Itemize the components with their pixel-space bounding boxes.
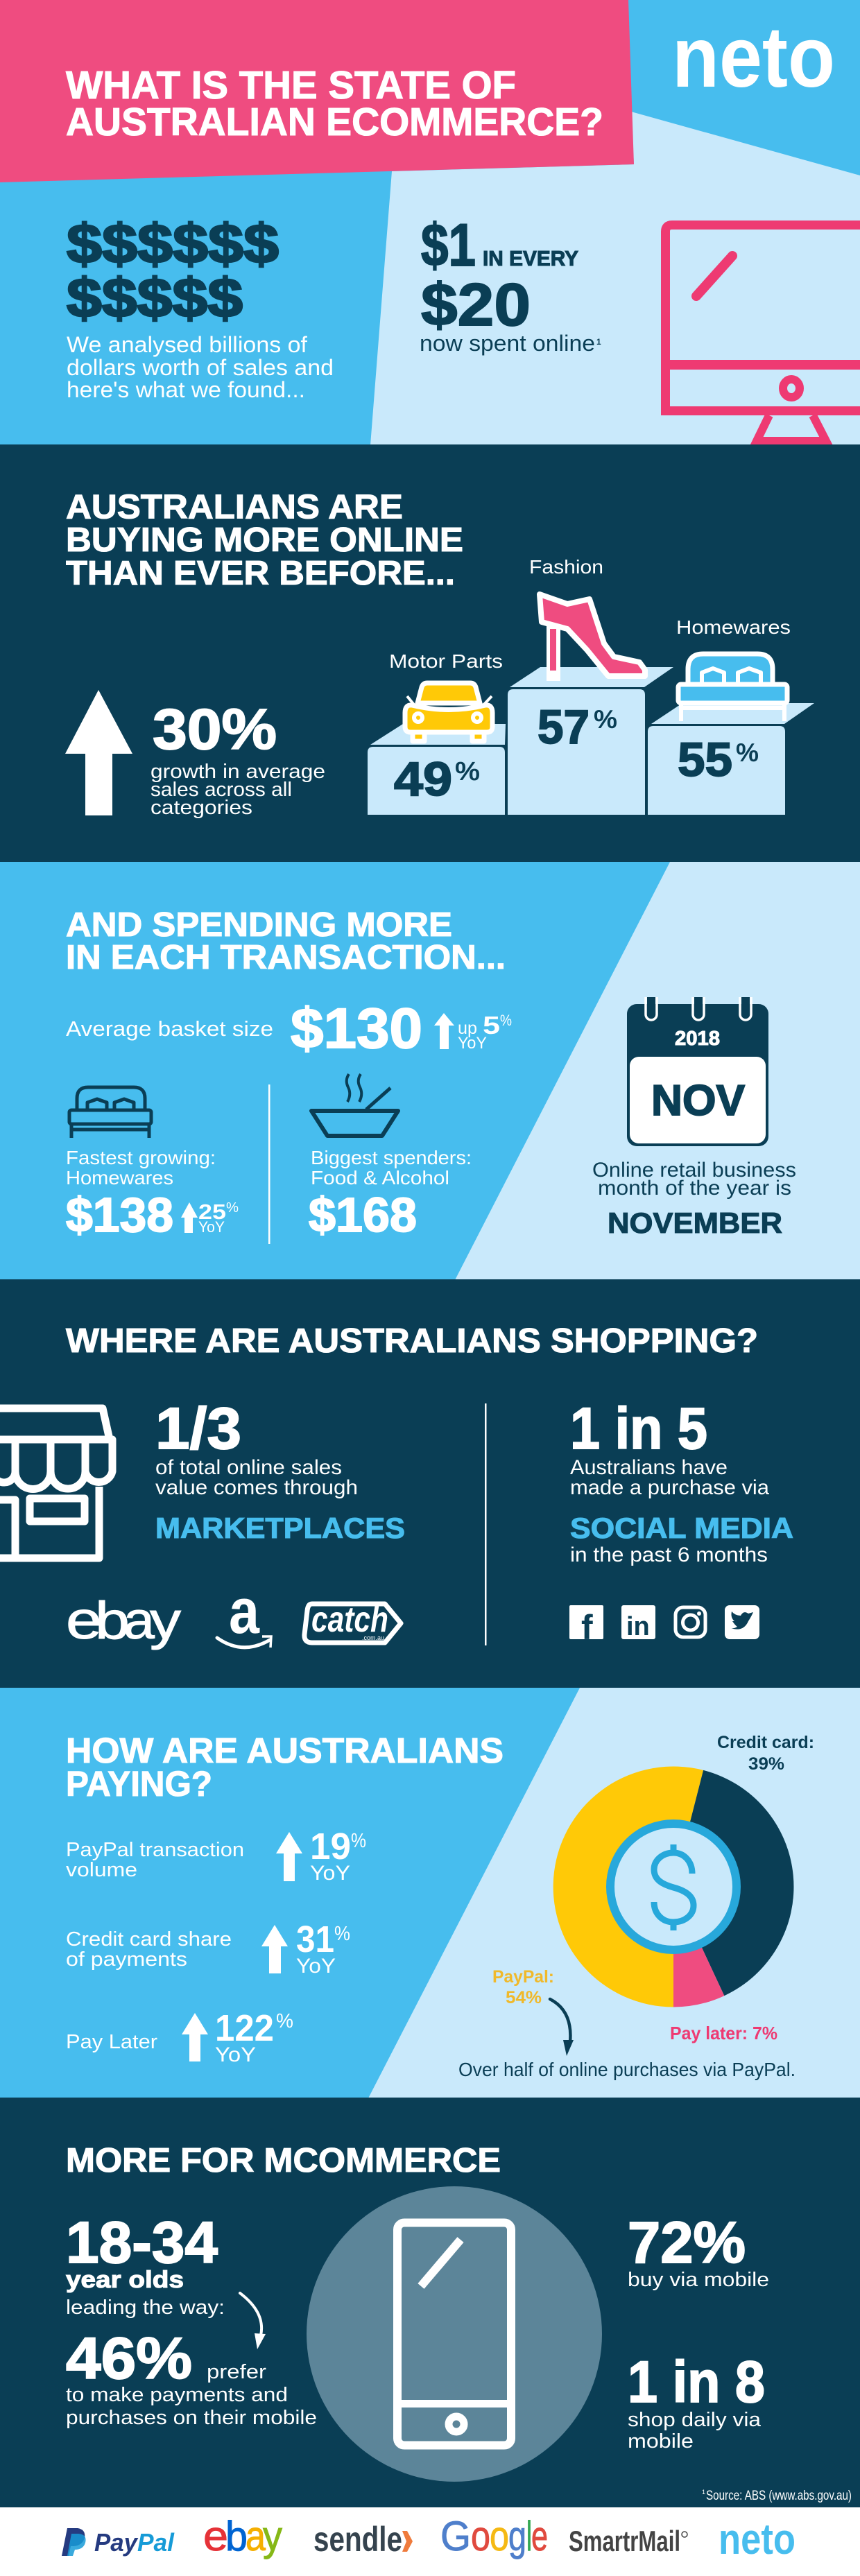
- icon: calendar: NOV: [651, 1077, 745, 1125]
- podium: homewares: Homewares: [676, 616, 791, 638]
- stat: average basket size: 5: [483, 1011, 500, 1039]
- panel: buying more online: [0, 444, 860, 862]
- logo: ebay: e: [66, 1591, 102, 1650]
- label: paypal: [492, 1967, 554, 2007]
- podium: homewares: [648, 616, 814, 815]
- stat: marketplaces: of total online sales: [155, 1456, 342, 1479]
- icon: mobile phone: [393, 2223, 515, 2445]
- label: paypal: 54%: [506, 1988, 542, 2007]
- stat: biggest spenders: $168: [309, 1188, 417, 1242]
- stat: biggest spenders: Biggest spenders:: [311, 1147, 472, 1168]
- podium: motor parts: Motor Parts: [389, 650, 503, 672]
- callout: busiest month: month of the year is: [598, 1177, 791, 1200]
- heading: THAN EVER BEFORE...: [66, 555, 455, 592]
- callout: busiest month: [592, 1159, 796, 1239]
- stat: 30% growth: sales across all: [150, 779, 292, 801]
- logo: paypal: Pay: [94, 2528, 139, 2557]
- logo: catch: catch: [311, 1600, 388, 1640]
- podium: fashion: %: [594, 705, 617, 734]
- icons: social media: [569, 1605, 759, 1647]
- icon: steaming bowl: [311, 1074, 398, 1136]
- stat: credit card share: YoY: [296, 1955, 336, 1978]
- icons: social media: in: [626, 1612, 650, 1641]
- logo: amazon: [217, 1576, 271, 1648]
- stat: fastest growing: Fastest growing:: [66, 1147, 216, 1168]
- stat: $1 in every $20: now spent online: [420, 331, 595, 356]
- logo: smartrmail: SmartrMail: [569, 2525, 680, 2557]
- caption: Over half of online purchases via PayPal.: [458, 2059, 796, 2080]
- stat: credit card share: Credit card share: [66, 1928, 232, 1951]
- logo: catch: .com.au: [362, 1634, 384, 1641]
- stat: fastest growing: [66, 1147, 239, 1242]
- stat: 72%: 72%: [628, 2210, 746, 2275]
- label: credit card: 39%: [748, 1754, 784, 1774]
- icon: calendar: 2018: [675, 1028, 720, 1050]
- logo: ebay: a: [123, 1591, 155, 1650]
- dollar signs: $$$$$: [67, 267, 243, 329]
- stat: social media: 1 in 5: [570, 1396, 707, 1461]
- neto logo: neto: [672, 10, 835, 105]
- logo: google: l: [526, 2513, 532, 2559]
- intro text: [67, 332, 334, 402]
- podium: homewares: %: [736, 738, 759, 767]
- stat: paypal volume: 19: [310, 1826, 351, 1867]
- panel: header and intro: [0, 0, 860, 445]
- dollar signs: [67, 213, 279, 329]
- icon: car: [405, 683, 492, 741]
- logo: google: G: [440, 2513, 471, 2559]
- intro text: dollars worth of sales and: [67, 355, 334, 380]
- logo: google: o: [471, 2513, 490, 2559]
- stat: average basket size: [66, 997, 512, 1060]
- stat: paypal volume: %: [351, 1830, 366, 1852]
- podium: homewares: 55: [678, 733, 732, 786]
- callout: busiest month: NOVEMBER: [608, 1207, 782, 1239]
- stat: $1 in every $20: [420, 212, 601, 356]
- heading: [66, 906, 506, 976]
- heading: AUSTRALIANS ARE: [66, 488, 403, 526]
- stat: social media: made a purchase via: [570, 1476, 769, 1499]
- stat: 46% prefer: prefer: [207, 2361, 266, 2383]
- heading: AND SPENDING MORE: [66, 906, 452, 944]
- logo: google: o: [490, 2513, 509, 2559]
- logo: ebay colour: y: [263, 2513, 282, 2559]
- stat: paypal volume: volume: [66, 1859, 137, 1881]
- stat: $1 in every $20: 1: [596, 337, 601, 347]
- stat: credit card share: 31: [296, 1919, 334, 1960]
- intro text: We analysed billions of: [67, 332, 307, 357]
- callout: busiest month: Online retail business: [592, 1159, 796, 1182]
- stat: $1 in every $20: IN EVERY: [483, 246, 578, 270]
- stat: credit card share: [66, 1919, 350, 1978]
- logo: paypal: Pal: [137, 2528, 175, 2557]
- heading: BUYING MORE ONLINE: [66, 521, 463, 559]
- panel: partner logos: [0, 2507, 860, 2576]
- podium: fashion: 57: [538, 700, 590, 754]
- icon: high heel shoe: [540, 594, 645, 681]
- podium: motor parts: [368, 650, 506, 815]
- stat: average basket size: %: [500, 1012, 512, 1029]
- stat: paypal volume: YoY: [310, 1862, 350, 1885]
- logo: ebay: b: [95, 1591, 130, 1650]
- icon: dollar sign: [654, 1844, 694, 1930]
- stat: 1 in 8: shop daily via: [628, 2409, 762, 2431]
- stat: paypal volume: [66, 1826, 366, 1885]
- stat: social media: Australians have: [570, 1456, 728, 1479]
- stat: average basket size: YoY: [458, 1034, 487, 1053]
- source note: 1: [702, 2489, 705, 2496]
- stat: 30% growth: 30%: [153, 697, 277, 761]
- panel: where australians shop: [0, 1279, 860, 1688]
- stat: biggest spenders: [309, 1147, 472, 1242]
- stat: credit card share: of payments: [66, 1948, 187, 1971]
- stat: credit card share: %: [334, 1923, 350, 1945]
- title banner: AUSTRALIAN ECOMMERCE?: [66, 100, 603, 144]
- stat: 18-34 year olds: leading the way:: [66, 2297, 225, 2319]
- logo: ebay colour: e: [203, 2513, 228, 2559]
- stat: pay later: Pay Later: [66, 2031, 157, 2053]
- stat: 1 in 8: 1 in 8: [628, 2349, 765, 2414]
- stat: marketplaces: [155, 1396, 405, 1544]
- logo: google: e: [531, 2513, 548, 2559]
- heading: MORE FOR MCOMMERCE: [66, 2142, 501, 2179]
- icon: bed: [678, 654, 787, 721]
- heading: [66, 488, 463, 592]
- logo: ebay colour: b: [225, 2513, 248, 2559]
- stat: 46% prefer: purchases on their mobile: [66, 2407, 317, 2429]
- logo: sendle: sendle: [313, 2520, 402, 2559]
- donut chart: payment share: [553, 1767, 793, 2007]
- logo: paypal: [62, 2528, 175, 2557]
- stat: social media: in the past 6 months: [570, 1544, 768, 1566]
- stat: pay later: %: [276, 2010, 293, 2032]
- logo: ebay colour: a: [246, 2513, 266, 2559]
- stat: 46% prefer: to make payments and: [66, 2384, 288, 2406]
- logo: ebay: y: [150, 1591, 181, 1650]
- stat: biggest spenders: Food & Alcohol: [311, 1167, 449, 1188]
- podium: fashion: [508, 556, 673, 815]
- heading: WHERE ARE AUSTRALIANS SHOPPING?: [66, 1322, 758, 1360]
- logo: google: g: [508, 2513, 526, 2559]
- panel: mcommerce: [0, 2098, 860, 2507]
- icon: desktop monitor: [661, 225, 860, 441]
- stat: social media: [570, 1396, 793, 1566]
- stat: fastest growing: $138: [66, 1188, 173, 1242]
- label: credit card: [717, 1733, 814, 1774]
- stat: 46% prefer: [66, 2326, 317, 2429]
- icon: up arrow: [65, 690, 132, 815]
- icon: storefront: [0, 1408, 112, 1558]
- stat: 46% prefer: 46%: [66, 2326, 192, 2391]
- label: credit card: Credit card:: [717, 1733, 814, 1752]
- stat: pay later: 122: [215, 2007, 274, 2049]
- stat: average basket size: Average basket size: [66, 1017, 273, 1041]
- logo: neto blue: neto: [719, 2516, 796, 2564]
- stat: 1 in 8: [628, 2349, 765, 2453]
- stat: fastest growing: YoY: [198, 1218, 225, 1236]
- stat: paypal volume: PayPal transaction: [66, 1839, 244, 1861]
- title banner: WHAT IS THE STATE OF: [66, 63, 516, 107]
- stat: average basket size: $130: [291, 997, 422, 1060]
- stat: fastest growing: %: [226, 1200, 239, 1216]
- stat: 1 in 8: mobile: [628, 2430, 694, 2453]
- stat: 18-34 year olds: year olds: [66, 2267, 184, 2293]
- stat: marketplaces: value comes through: [155, 1476, 358, 1499]
- icon: bed outline: [69, 1087, 151, 1138]
- stat: fastest growing: Homewares: [66, 1167, 173, 1188]
- circle behind phone: [307, 2186, 602, 2482]
- stat: 72%: [628, 2210, 769, 2291]
- heading: IN EACH TRANSACTION...: [66, 939, 506, 976]
- panel: how australians pay: [0, 1688, 860, 2098]
- stat: average basket size: up: [458, 1019, 477, 1038]
- heading: PAYING?: [66, 1764, 212, 1804]
- icons: social media: f: [581, 1608, 593, 1647]
- intro text: here's what we found...: [67, 377, 305, 402]
- label: pay later: Pay later: 7%: [670, 2023, 777, 2043]
- podium: motor parts: 49: [394, 752, 452, 806]
- heading: [66, 1731, 504, 1804]
- stat: 30% growth: categories: [150, 797, 252, 819]
- logo: ebay: [66, 1591, 181, 1650]
- stat: fastest growing: 25: [198, 1200, 226, 1224]
- stat: marketplaces: MARKETPLACES: [155, 1512, 405, 1544]
- stat: 72%: buy via mobile: [628, 2269, 769, 2291]
- stat: social media: SOCIAL MEDIA: [570, 1512, 793, 1544]
- stat: marketplaces: 1/3: [155, 1396, 241, 1461]
- dollar signs: $$$$$$: [67, 213, 279, 275]
- title banner: [0, 0, 634, 182]
- arrow: curved white: [240, 2293, 266, 2349]
- logo: ebay colour: [203, 2513, 282, 2559]
- heading: HOW ARE AUSTRALIANS: [66, 1731, 504, 1770]
- label: paypal: PayPal:: [492, 1967, 554, 1987]
- arrow: curved to caption: [550, 1999, 574, 2056]
- stat: 30% growth: [150, 697, 325, 819]
- stat: $1 in every $20: $1: [421, 212, 476, 279]
- podium: fashion: Fashion: [529, 556, 603, 578]
- stat: $1 in every $20: $20: [421, 272, 531, 338]
- panel: spending more per transaction: [0, 862, 860, 1280]
- podium: motor parts: %: [455, 757, 480, 786]
- stat: pay later: [66, 2007, 293, 2066]
- stat: 18-34 year olds: 18-34: [66, 2210, 218, 2275]
- stat: 18-34 year olds: [66, 2210, 225, 2319]
- stat: 30% growth: growth in average: [150, 761, 325, 783]
- stat: pay later: YoY: [215, 2043, 256, 2066]
- logo: amazon: a: [229, 1576, 260, 1647]
- logo: google: [440, 2513, 548, 2559]
- icon: calendar: [627, 997, 768, 1146]
